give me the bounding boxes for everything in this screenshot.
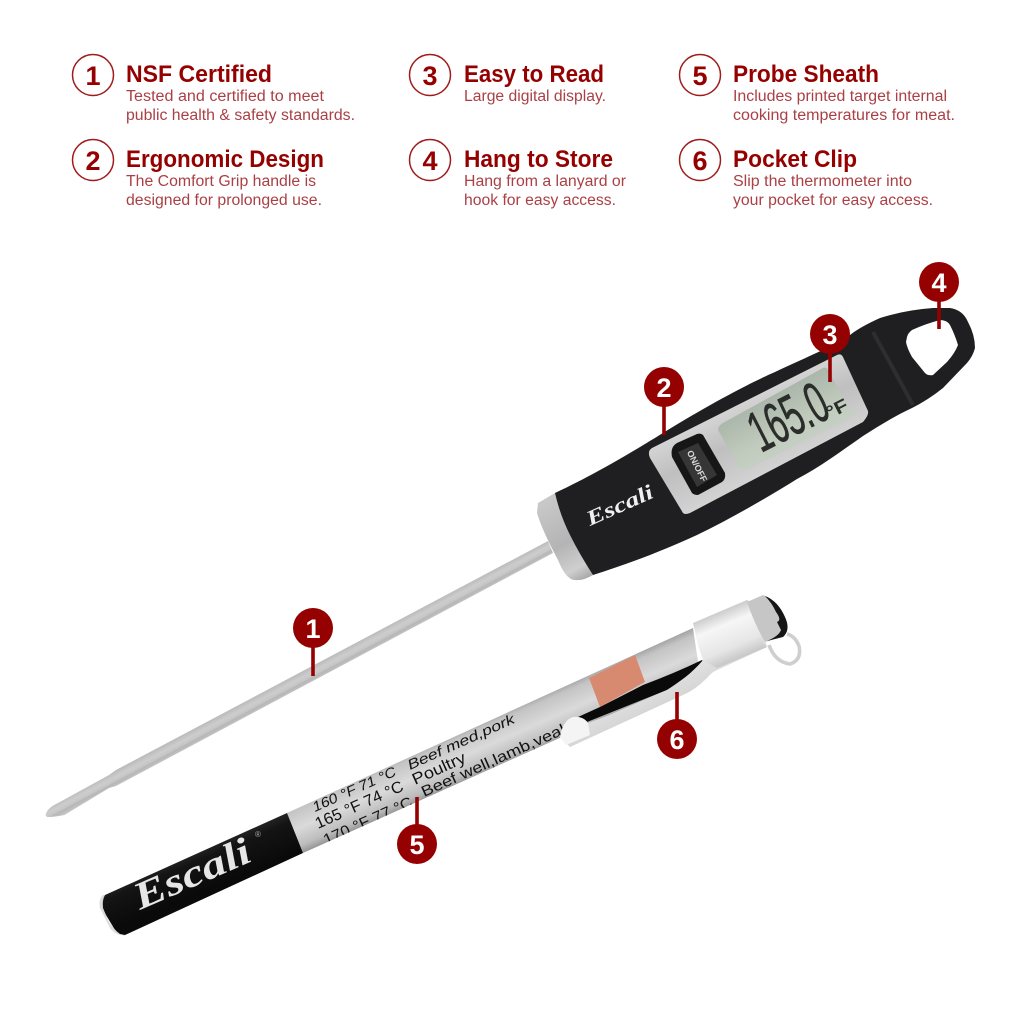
cap rim bbox=[747, 595, 786, 642]
feature 5: Probe Sheath: Includes printed target internal bbox=[733, 88, 947, 105]
registered mark: ® bbox=[255, 830, 261, 839]
marker 4 bbox=[919, 262, 959, 329]
sheath cap bbox=[693, 600, 767, 668]
feature 2: Ergonomic Design bbox=[72, 140, 324, 209]
marker 1: 1 bbox=[305, 614, 321, 644]
LCD display bbox=[718, 368, 852, 470]
sheath black end bbox=[102, 813, 303, 935]
pocket clip shadow slit bbox=[578, 660, 704, 722]
marker 1 bbox=[293, 608, 333, 676]
LCD display: 165.0 bbox=[737, 370, 839, 465]
feature 6: Pocket Clip: Pocket Clip bbox=[733, 146, 857, 173]
printed temperature table: 170 °F 77 °C bbox=[321, 794, 415, 849]
printed temperature table: Beef well,lamb,veal bbox=[419, 721, 568, 801]
grip ridge bbox=[873, 332, 913, 405]
power button: ON/OFF bbox=[685, 449, 709, 484]
feature 1: NSF Certified: 1 bbox=[85, 61, 101, 91]
feature 4: Hang to Store: 4 bbox=[422, 146, 438, 176]
marker 3 bbox=[810, 314, 850, 382]
sheath logo: Escali bbox=[126, 830, 258, 919]
feature 2: Ergonomic Design: 2 bbox=[85, 146, 101, 176]
sheath end highlight bbox=[99, 895, 125, 935]
thermometer probe bbox=[46, 541, 553, 817]
feature 1: NSF Certified: public health & safety standards. bbox=[126, 107, 355, 124]
feature 6: Pocket Clip: Slip the thermometer into bbox=[733, 173, 912, 190]
handle logo: Escali bbox=[581, 480, 657, 531]
steel face plate bbox=[649, 354, 868, 514]
feature 1: NSF Certified bbox=[72, 54, 355, 124]
cap opening bbox=[765, 596, 788, 641]
target colour band bbox=[589, 655, 645, 707]
feature 6: Pocket Clip: your pocket for easy access. bbox=[733, 192, 933, 209]
feature 5: Probe Sheath: Probe Sheath bbox=[733, 61, 879, 88]
pocket clip bbox=[560, 620, 767, 747]
printed temperature table: Poultry bbox=[410, 750, 469, 789]
marker 5 bbox=[397, 797, 437, 864]
feature 1: NSF Certified: Tested and certified to meet bbox=[126, 88, 325, 105]
feature 4: Hang to Store: Hang from a lanyard or bbox=[464, 173, 626, 190]
feature 6: Pocket Clip bbox=[680, 140, 933, 209]
feature 5: Probe Sheath bbox=[680, 54, 955, 124]
printed temperature table bbox=[314, 715, 562, 842]
printed temperature table: Beef med,pork bbox=[405, 710, 518, 773]
printed temperature table: 160 °F 71 °C bbox=[310, 763, 399, 815]
feature 2: Ergonomic Design: The Comfort Grip handle is bbox=[126, 173, 316, 190]
feature 3: Easy to Read: Large digital display. bbox=[464, 88, 606, 105]
feature 4: Hang to Store: hook for easy access. bbox=[464, 192, 616, 209]
marker 6 bbox=[657, 692, 697, 759]
marker 4: 4 bbox=[931, 268, 947, 298]
feature 3: Easy to Read: 3 bbox=[422, 61, 438, 91]
marker 3: 3 bbox=[822, 320, 838, 350]
feature 6: Pocket Clip: 6 bbox=[692, 146, 708, 176]
feature 5: Probe Sheath: cooking temperatures for meat. bbox=[733, 107, 955, 124]
feature 1: NSF Certified: NSF Certified bbox=[126, 61, 272, 88]
hanging ring bbox=[769, 634, 800, 664]
feature 4: Hang to Store bbox=[410, 140, 626, 209]
feature 4: Hang to Store: Hang to Store bbox=[464, 146, 613, 173]
marker 2: 2 bbox=[656, 373, 672, 403]
marker 2 bbox=[644, 367, 684, 435]
feature 3: Easy to Read bbox=[410, 54, 606, 105]
power button bbox=[672, 434, 725, 495]
printed temperature table: 165 °F 74 °C bbox=[313, 778, 406, 833]
feature 2: Ergonomic Design: Ergonomic Design bbox=[126, 146, 324, 173]
handle body with hanging loop bbox=[555, 308, 975, 575]
feature 5: Probe Sheath: 5 bbox=[692, 61, 708, 91]
handle collar bbox=[537, 493, 593, 580]
clip white tip bbox=[560, 717, 590, 745]
feature 2: Ergonomic Design: designed for prolonged use. bbox=[126, 192, 322, 209]
probe sheath bbox=[99, 595, 800, 935]
thermometer handle bbox=[537, 308, 975, 580]
marker 5: 5 bbox=[409, 830, 425, 860]
feature 3: Easy to Read: Easy to Read bbox=[464, 61, 604, 88]
marker 6: 6 bbox=[669, 725, 685, 755]
LCD display: °F bbox=[823, 395, 851, 423]
sheath steel barrel bbox=[287, 628, 700, 853]
